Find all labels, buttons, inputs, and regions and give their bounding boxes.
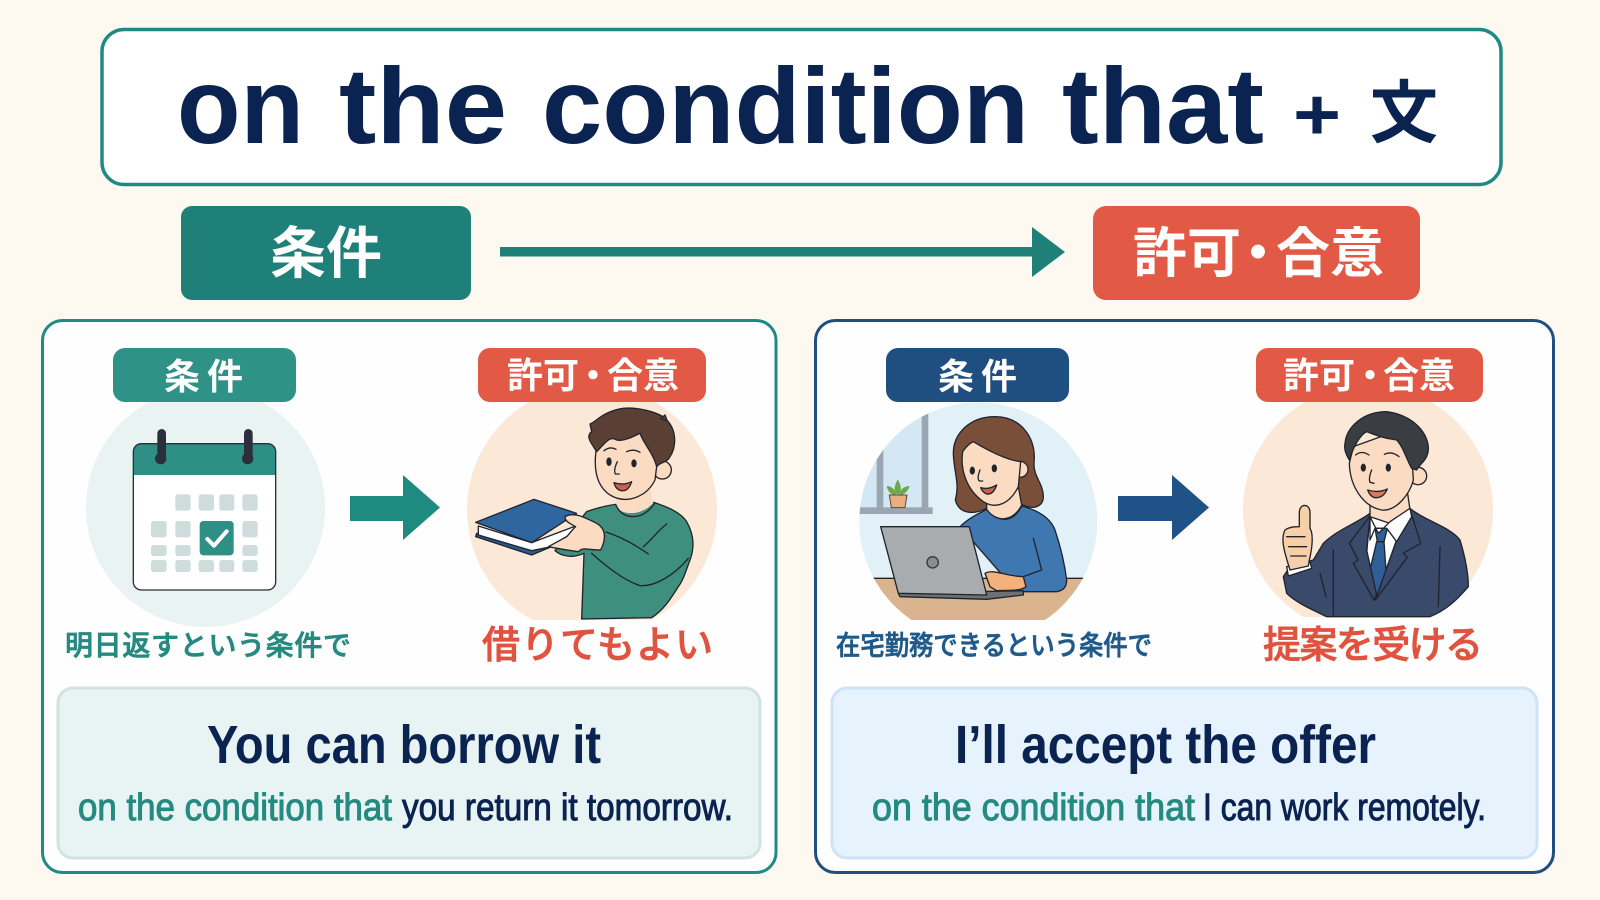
illustration circle: boy background [467,402,717,620]
permission pill: 許可・合意 [1283,355,1455,396]
panel: library example [42,320,776,872]
flow label: condition [181,206,471,300]
condition clause: you return it tomorrow. [402,787,733,829]
example sentence box [58,688,760,858]
icon: calendar [133,429,276,590]
permission pill: 許可・合意 [507,355,679,396]
condition clause [78,787,733,829]
condition pill [886,348,1069,402]
flow label: permission and agreement [1093,206,1420,300]
title text: that [1062,45,1264,166]
condition clause: on the condition that [872,787,1195,829]
icon circle: calendar background [86,388,325,627]
arrow [1118,475,1209,540]
example sentence box [832,688,1537,858]
title banner [102,30,1501,184]
illustration circle: man background [1243,402,1493,617]
condition clause [872,787,1486,829]
main clause: You can borrow it [207,715,601,775]
illustration: woman working on a laptop [860,402,1098,620]
title text: on [177,45,304,166]
flow arrow [500,227,1065,277]
condition clause: on the condition that [78,787,392,829]
condition pill [113,348,296,402]
title text [177,45,1438,166]
condition pill: 条件 [938,356,1017,397]
arrow [350,475,440,540]
illustration: boy handing over a book [476,408,693,619]
illustration: businessman giving a thumbs up [1283,412,1468,617]
condition caption: 在宅勤務できるという条件で [836,631,1152,661]
condition pill: 条件 [164,356,243,397]
panel: remote work example [810,320,1554,872]
title text: 文 [1370,76,1438,152]
permission pill [1256,348,1483,402]
permission caption: 提案を受ける [1263,625,1483,667]
flow label: permission and agreement: 許可・合意 [1133,224,1384,284]
permission pill [478,348,706,402]
main clause: I’ll accept the offer [955,715,1376,775]
permission caption: 借りてもよい [482,625,713,667]
title text: condition [542,45,1029,166]
flow label: condition: 条件 [270,222,382,285]
condition clause: I can work remotely. [1203,787,1486,829]
title text: the [339,45,507,166]
title text: + [1293,75,1341,155]
condition caption: 明日返すという条件で [65,630,351,661]
